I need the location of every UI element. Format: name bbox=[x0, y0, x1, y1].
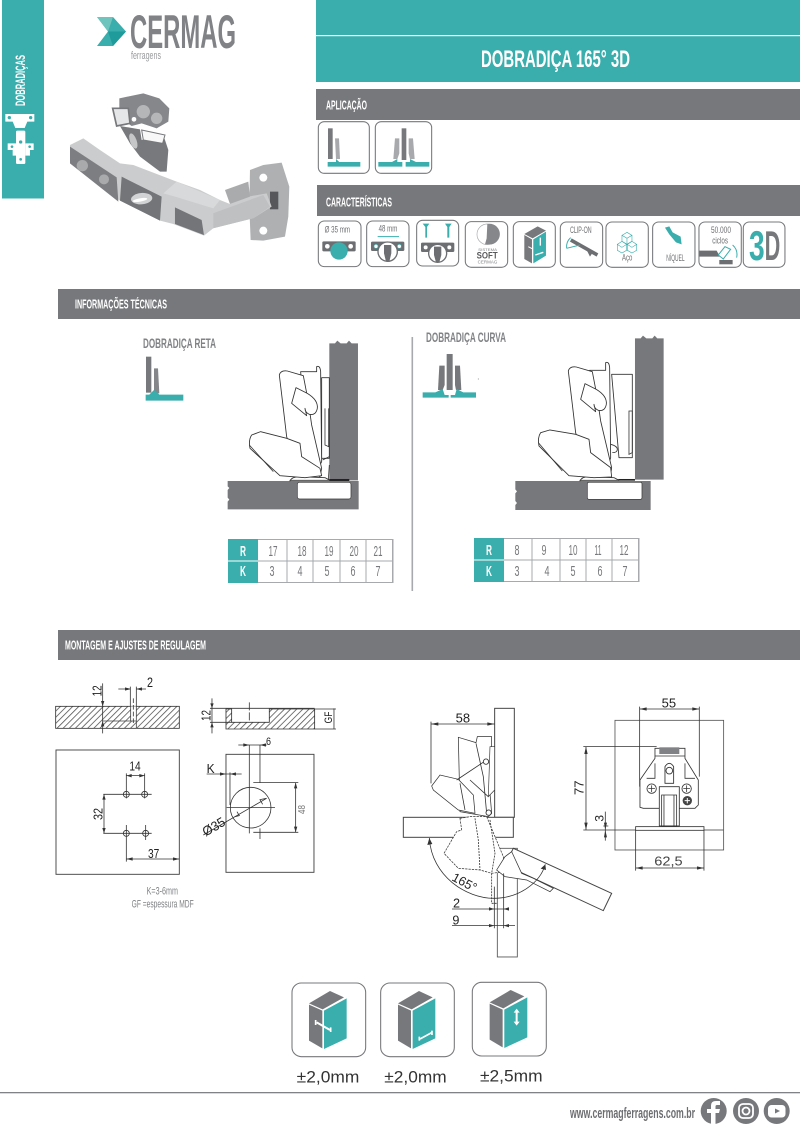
table: R and K values: 20 bbox=[350, 544, 358, 560]
product image: hinge bbox=[70, 93, 289, 241]
table: R and K values: 6 bbox=[598, 564, 602, 580]
icon: screws bbox=[417, 220, 459, 266]
icon: 3D bbox=[743, 222, 785, 269]
icon: 48 mm spacing bbox=[367, 221, 409, 267]
table: R and K values bbox=[228, 539, 393, 583]
icon: 3D adjustment bbox=[513, 222, 555, 267]
hinge mounting plate bbox=[113, 93, 169, 172]
icon: straight overlay bbox=[146, 357, 183, 401]
icon: 3D: D bbox=[765, 222, 780, 269]
logo wordmark: CERMAG bbox=[130, 5, 236, 58]
logo subtitle: ferragens bbox=[131, 50, 161, 62]
table: R and K values bbox=[474, 538, 639, 582]
icon: nickel bbox=[653, 222, 695, 267]
diagram: cup section: 12 bbox=[198, 710, 213, 721]
heading bar: informações técnicas bbox=[58, 289, 800, 319]
table: R and K values: 8 bbox=[514, 543, 520, 559]
icon: 3D: 3 bbox=[749, 222, 765, 269]
cross-section: curved hinge bbox=[478, 336, 664, 510]
icon: 48 mm spacing: 48 mm bbox=[379, 223, 397, 233]
note: K and GF bbox=[132, 885, 194, 910]
icon: clip-on: CLIP-ON bbox=[570, 225, 592, 235]
diagram: side view with opening angle: 58 bbox=[456, 711, 470, 726]
icon: 50.000 cycles: 50.000 bbox=[711, 225, 731, 235]
application icons bbox=[318, 122, 432, 173]
icon: clip-on bbox=[560, 222, 603, 267]
logo chevron bbox=[97, 17, 126, 46]
table: R and K values: 9 bbox=[542, 543, 546, 559]
heading bar: aplicação: APLICAÇÃO bbox=[326, 98, 367, 112]
diagram: cup section bbox=[198, 698, 336, 733]
diagram: door section bbox=[56, 674, 179, 733]
table: R and K values: R bbox=[240, 543, 246, 560]
hinge cup plate bbox=[249, 163, 289, 241]
heading bar: montagem e ajustes: MONTAGEM E AJUSTES DE REGULAGEM bbox=[65, 638, 206, 652]
diagram: side view with opening angle: 2 bbox=[453, 896, 460, 910]
icon: soft close: SOFT bbox=[477, 250, 498, 260]
icon: soft close: SISTEMA bbox=[478, 248, 498, 252]
diagram: front view of hinge bbox=[571, 695, 724, 871]
icon: soft close: CERMAG bbox=[478, 259, 498, 264]
heading bar: características: CARACTERÍSTICAS bbox=[326, 194, 392, 210]
value: ±2,0mm bbox=[384, 1068, 447, 1087]
diagram: cup section: GF bbox=[323, 711, 335, 723]
sidebar label: DOBRADIÇAS bbox=[12, 55, 28, 106]
table: R and K values: 7 bbox=[622, 564, 628, 580]
diagram: hinge holes: 32 bbox=[90, 808, 105, 820]
table: R and K values: 5 bbox=[324, 564, 330, 580]
logo: Cermag bbox=[97, 5, 236, 62]
table: R and K values: 5 bbox=[570, 564, 576, 580]
diagram: hinge holes bbox=[56, 750, 179, 874]
value: ±2,0mm bbox=[297, 1068, 359, 1087]
icon: depth adjustment bbox=[292, 983, 366, 1087]
icon: side adjustment bbox=[381, 983, 454, 1087]
drilling diagrams bbox=[56, 674, 336, 910]
feature icons bbox=[318, 220, 785, 269]
table: R and K values: 3 bbox=[270, 564, 274, 580]
icon: steel: Aço bbox=[622, 253, 632, 263]
hinge arm bbox=[70, 138, 272, 236]
diagram: front view of hinge: 77 bbox=[571, 781, 586, 795]
table: R and K values: 17 bbox=[268, 544, 278, 560]
icon: height adjustment bbox=[472, 982, 546, 1086]
panel: dobradiça curva bbox=[423, 329, 664, 582]
table: R and K values: R bbox=[486, 542, 492, 559]
table: R and K values: 4 bbox=[544, 564, 550, 580]
adjustment icons bbox=[292, 982, 546, 1087]
heading bar: montagem e ajustes bbox=[58, 630, 800, 660]
website: www.cermagferragens.com.br bbox=[569, 1106, 695, 1122]
table: R and K values: 21 bbox=[374, 544, 382, 560]
icon: 50.000 cycles bbox=[699, 222, 741, 267]
table: R and K values: 11 bbox=[594, 543, 602, 559]
table: R and K values: 6 bbox=[350, 564, 356, 580]
diagram: side view with opening angle: 165° bbox=[450, 870, 479, 895]
diagram: cup position: 6 bbox=[266, 736, 271, 748]
note: K and GF: K=3-6mm bbox=[147, 885, 178, 897]
table: R and K values: 3 bbox=[514, 564, 520, 580]
heading bar: características bbox=[317, 185, 800, 216]
icon: 50.000 cycles: ciclos bbox=[712, 236, 728, 246]
icon: soft close bbox=[465, 222, 508, 267]
table: R and K values: 4 bbox=[298, 564, 302, 580]
table: R and K values: 10 bbox=[568, 543, 578, 559]
heading: dobradiça reta: DOBRADIÇA RETA bbox=[143, 335, 216, 351]
icon: instagram bbox=[733, 1098, 759, 1124]
cross-section: straight hinge bbox=[228, 341, 359, 509]
icon: straight application bbox=[318, 122, 369, 173]
diagram: front view of hinge: 55 bbox=[662, 695, 676, 710]
heading bar: informações técnicas: INFORMAÇÕES TÉCNICAS bbox=[75, 296, 167, 312]
diagram: front view of hinge: 62,5 bbox=[654, 853, 683, 868]
diagram: cup position: Ø35 bbox=[200, 814, 228, 839]
icon: nickel: NÍQUEL bbox=[666, 253, 685, 263]
table: R and K values: K bbox=[486, 563, 492, 580]
heading bar: aplicação bbox=[316, 89, 800, 120]
diagram: door section: 2 bbox=[147, 674, 153, 690]
diagram: cup position: 48 bbox=[297, 805, 308, 814]
diagram: cup position: K bbox=[207, 761, 215, 776]
table: R and K values: 18 bbox=[298, 544, 306, 560]
heading: dobradiça curva: DOBRADIÇA CURVA bbox=[426, 329, 506, 345]
diagram: hinge holes: 14 bbox=[129, 759, 141, 774]
table: R and K values: 7 bbox=[376, 564, 380, 580]
title banner bbox=[316, 0, 800, 82]
icon: curved overlay bbox=[423, 354, 476, 398]
diagram: front view of hinge: 3 bbox=[592, 815, 606, 822]
diagram: door section: 12 bbox=[89, 685, 104, 696]
diagram: side view with opening angle bbox=[403, 708, 612, 957]
diagram: cup position bbox=[200, 736, 314, 872]
note: K and GF: GF =espessura MDF bbox=[132, 898, 194, 910]
table: R and K values: 12 bbox=[620, 543, 628, 559]
diagram: side view with opening angle: 9 bbox=[452, 913, 459, 927]
icon: 35 mm cup bbox=[318, 221, 361, 267]
title: DOBRADIÇA 165° 3D bbox=[481, 46, 630, 73]
table: R and K values: K bbox=[240, 563, 246, 580]
diagram: hinge holes: 37 bbox=[148, 846, 159, 861]
footer bbox=[569, 1098, 790, 1124]
icon: youtube bbox=[764, 1098, 790, 1124]
icon: facebook bbox=[701, 1098, 727, 1124]
table: R and K values: 19 bbox=[324, 544, 334, 560]
icon: 35 mm cup: Ø 35 mm bbox=[325, 224, 350, 234]
panel: dobradiça reta bbox=[143, 335, 393, 583]
icon: steel bbox=[606, 222, 648, 267]
icon: curved application bbox=[375, 122, 432, 173]
icon: hinge bbox=[5, 114, 34, 164]
sidebar: category tab bbox=[2, 0, 44, 198]
value: ±2,5mm bbox=[480, 1067, 543, 1086]
